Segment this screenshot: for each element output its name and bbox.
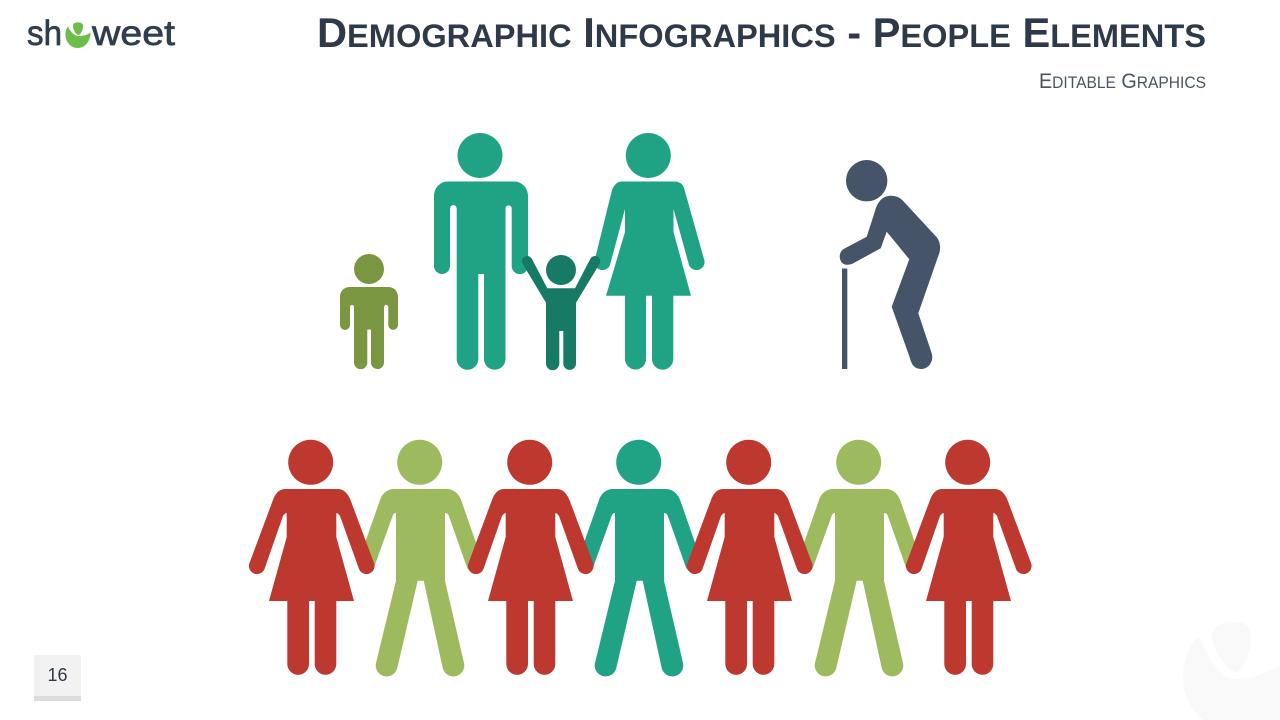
logo: showeet xyxy=(27,14,175,53)
icon: small boy xyxy=(340,254,398,369)
subtitle: EDITABLE GRAPHICS xyxy=(1039,69,1206,93)
man 3, light green xyxy=(797,440,922,676)
page number: 16 xyxy=(47,665,68,685)
row of people holding hands xyxy=(249,440,1032,676)
icon: mother xyxy=(594,133,705,370)
icon: father xyxy=(434,133,528,370)
woman 2, red xyxy=(468,440,594,675)
logo: showeet: weet xyxy=(91,14,175,53)
woman 1, red xyxy=(249,440,375,675)
icon: elderly man with cane xyxy=(840,160,940,369)
man 1, light green xyxy=(358,440,483,676)
title: DEMOGRAPHIC INFOGRAPHICS - PEOPLE ELEMENTS xyxy=(317,9,1206,56)
woman 3, red xyxy=(687,440,813,675)
woman 4, red xyxy=(906,440,1032,675)
page number xyxy=(34,655,81,701)
man 2, teal xyxy=(577,440,702,676)
logo: showeet: sh xyxy=(27,14,62,53)
icon: child with raised arms xyxy=(522,255,600,370)
watermark logo xyxy=(1183,622,1280,720)
